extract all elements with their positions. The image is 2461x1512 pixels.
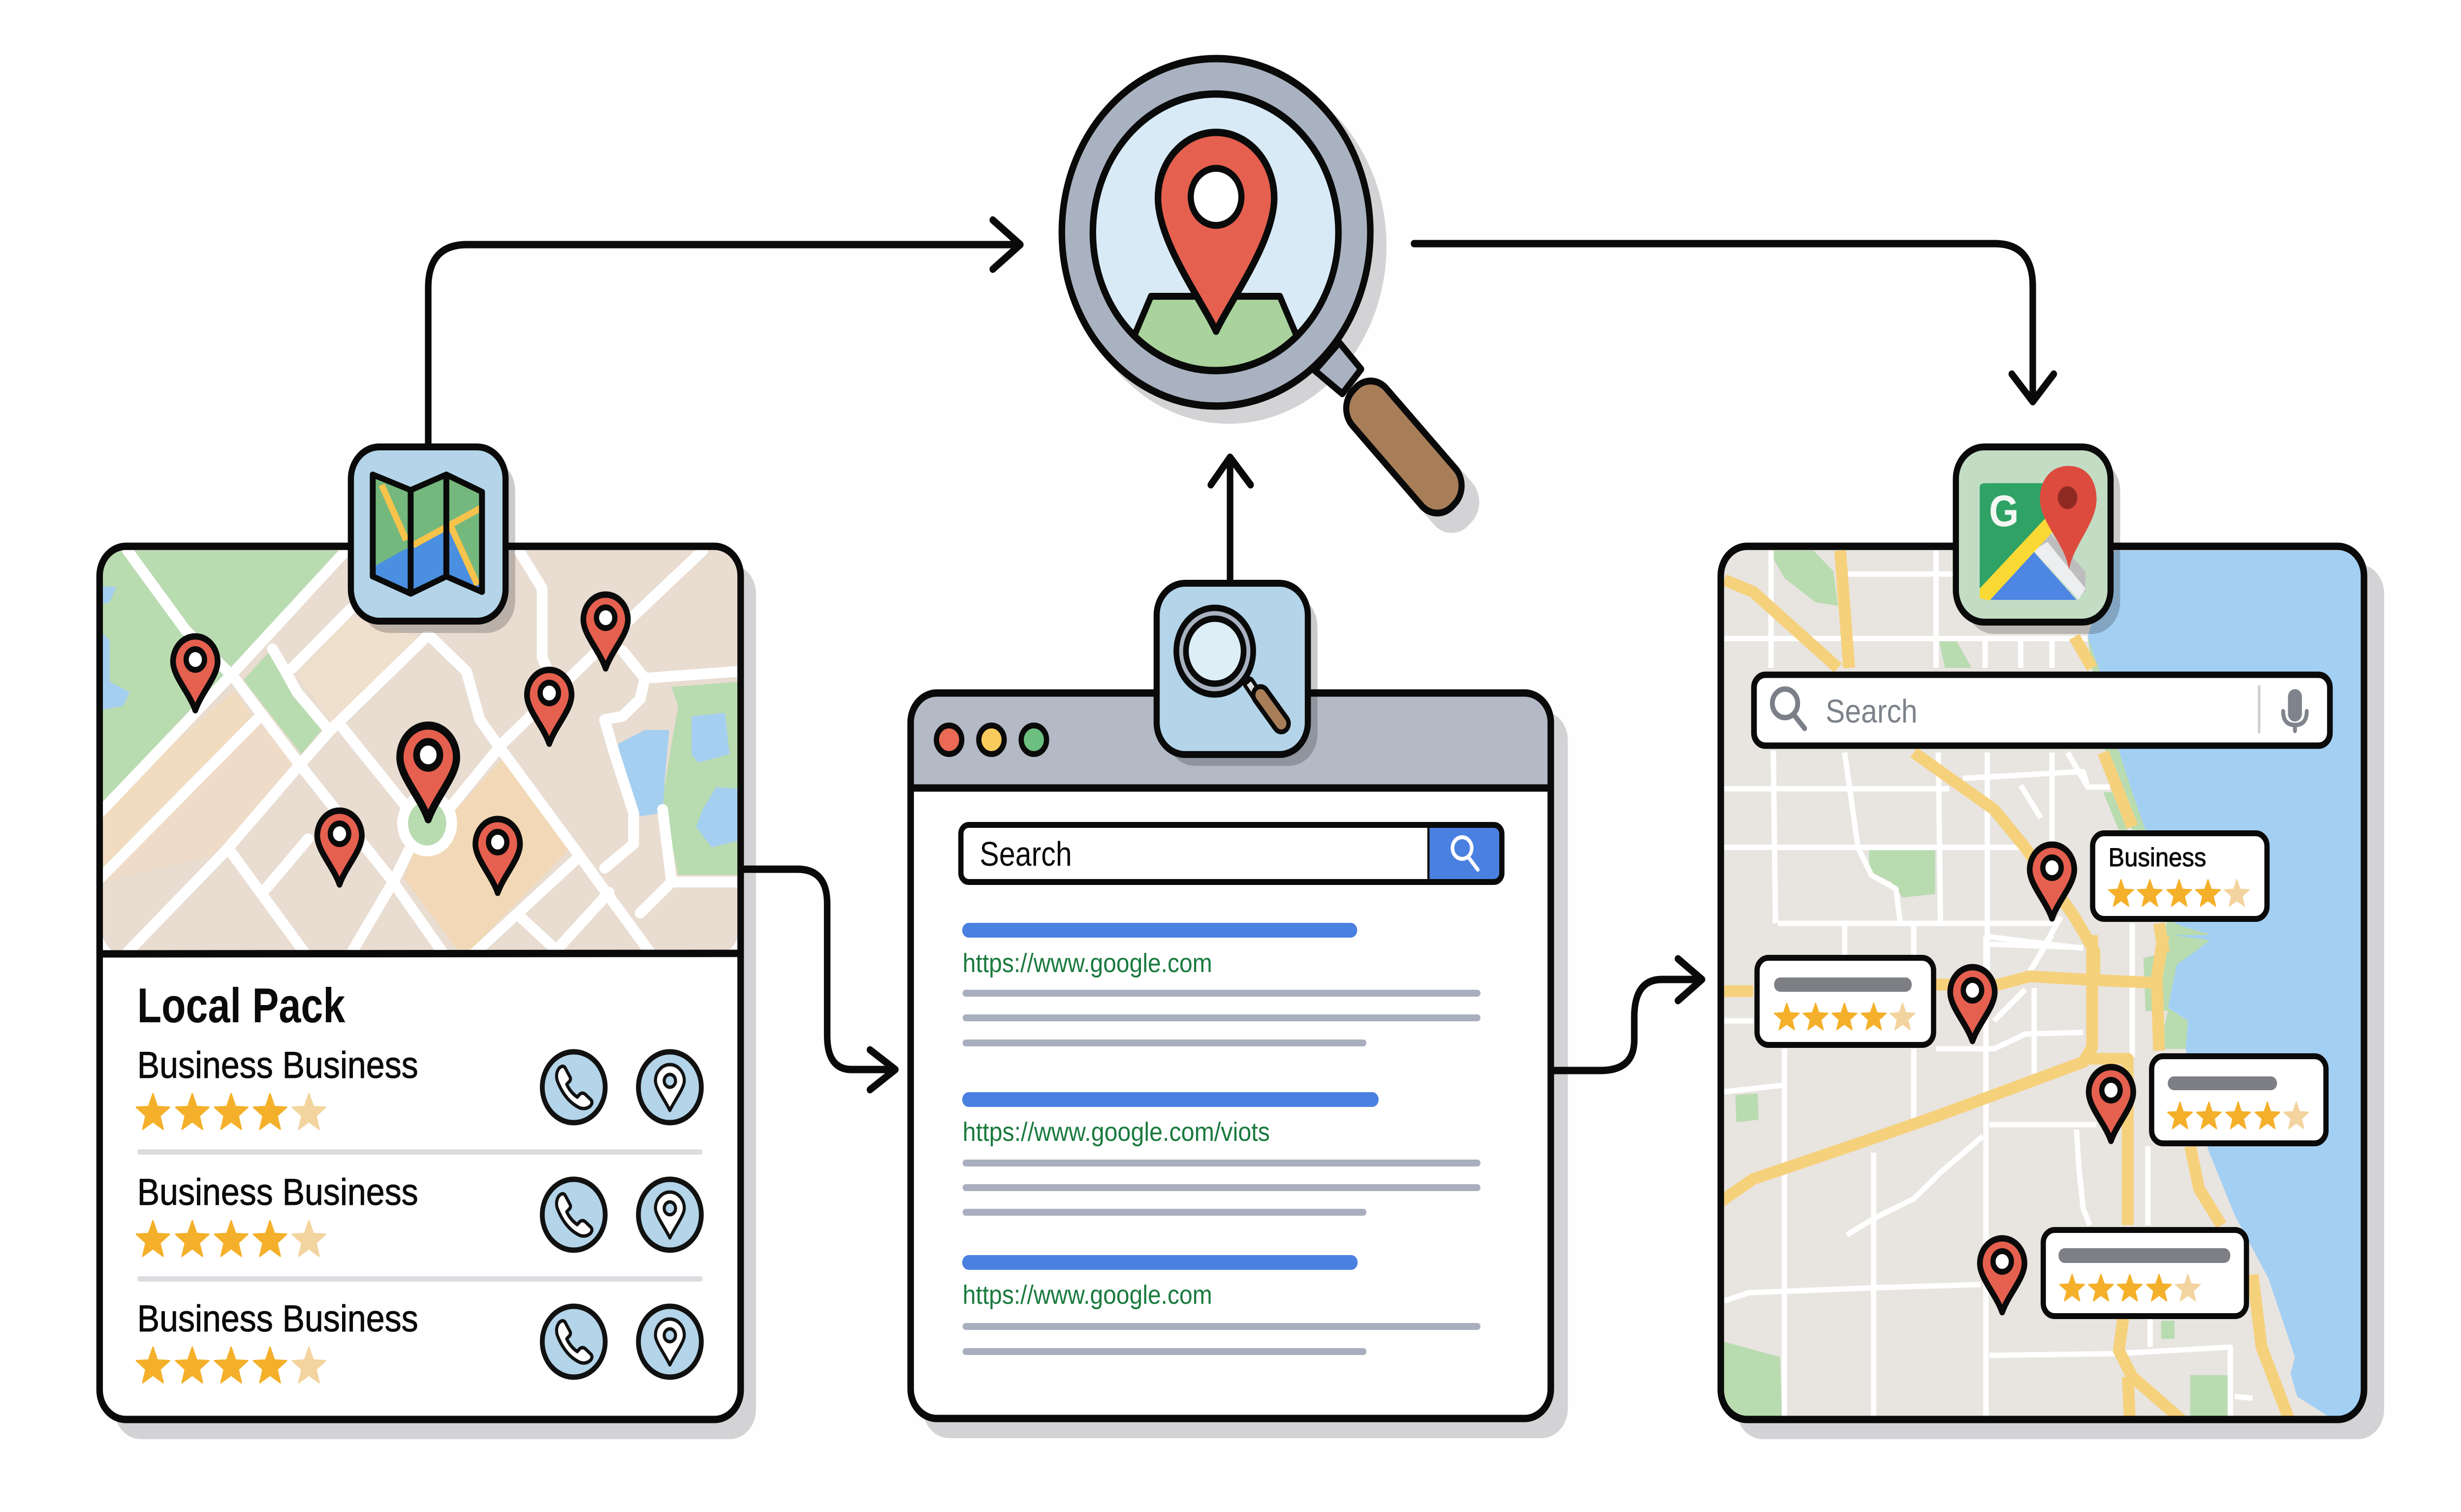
panel shadow	[115, 564, 756, 1439]
map pin	[583, 595, 628, 668]
callout: business	[2093, 833, 2267, 919]
icon tile: google maps	[1956, 447, 2120, 634]
magnifier lens	[1093, 94, 1338, 371]
icon tile: magnifier	[1157, 583, 1318, 766]
icon: microphone	[2283, 689, 2307, 731]
star rating	[136, 1347, 325, 1383]
window control: red	[937, 725, 962, 754]
icon tile: folded map	[351, 447, 515, 633]
panel: local pack	[96, 546, 756, 1439]
map	[1720, 546, 2368, 1423]
icon: google maps logo	[1980, 466, 2097, 600]
browser window	[911, 693, 1551, 1418]
map pin	[475, 819, 520, 893]
icon: location	[638, 1179, 701, 1250]
panel: search results browser	[911, 693, 1568, 1438]
result url: https://www.google.com	[963, 1280, 1212, 1310]
result url: https://www.google.com	[963, 948, 1212, 978]
icon: phone	[542, 1306, 605, 1377]
result title bar	[962, 923, 1357, 938]
arrow: local pack to search results	[743, 869, 895, 1090]
map pin: business	[2030, 845, 2074, 918]
star rating	[136, 1094, 325, 1129]
listing 3	[136, 1298, 701, 1383]
listing 2	[136, 1171, 701, 1256]
star rating	[2060, 1274, 2200, 1301]
map pin	[173, 636, 218, 710]
map pin: listing 3	[2089, 1067, 2133, 1141]
map search bar	[1754, 675, 2330, 746]
result title bar	[962, 1255, 1357, 1270]
panel shadow	[1736, 564, 2384, 1439]
title bar	[911, 693, 1551, 788]
location pin	[1158, 132, 1274, 331]
arrow: search tile to magnifier	[1211, 457, 1251, 581]
icon: phone	[542, 1052, 605, 1123]
listing 1	[136, 1044, 701, 1129]
result 3	[962, 1255, 1481, 1355]
map pin: listing 2	[1950, 967, 1995, 1041]
result snippet	[963, 1323, 1481, 1355]
callout: listing 4	[2043, 1230, 2246, 1316]
arrow: magnifier to google maps	[1414, 244, 2054, 402]
arrow: map tile to magnifier	[428, 220, 1020, 450]
magnifier with pin	[1062, 59, 1489, 544]
letter G: G	[1989, 487, 2019, 536]
search placeholder: Search	[1826, 693, 1918, 730]
map pin: large	[400, 725, 457, 819]
business name: Business Business	[137, 1298, 418, 1340]
arrow: results to google maps	[1552, 959, 1702, 1071]
window control: green	[1021, 725, 1046, 754]
business label: Business	[2109, 843, 2206, 872]
window control: yellow	[979, 725, 1004, 754]
callout: listing 3	[2151, 1056, 2326, 1143]
result title bar	[962, 1092, 1379, 1107]
panel border	[1721, 546, 2364, 1419]
search text: Search	[979, 835, 1072, 874]
magnifier shadow	[1071, 68, 1489, 544]
callout: listing 2	[1757, 958, 1933, 1045]
star rating	[2109, 880, 2249, 906]
business name: Business Business	[137, 1044, 418, 1086]
result 2	[962, 1092, 1481, 1216]
panel body	[99, 546, 741, 1419]
magnifier ring	[1062, 59, 1370, 406]
divider	[99, 953, 741, 954]
business name: Business Business	[137, 1171, 418, 1213]
search bar	[961, 825, 1502, 882]
green land	[1119, 296, 1311, 394]
icon: search	[1452, 837, 1478, 870]
result snippet	[963, 1160, 1481, 1216]
magnifier handle	[1337, 371, 1471, 523]
result url: https://www.google.com/viots	[963, 1117, 1270, 1147]
panel shadow	[923, 711, 1568, 1438]
star rating	[136, 1221, 325, 1256]
map pin	[317, 811, 362, 884]
map pin: listing 4	[1980, 1238, 2024, 1312]
icon: search	[1772, 689, 1805, 728]
panel border	[99, 546, 741, 1419]
magnifier neck	[1315, 343, 1361, 394]
result snippet	[963, 990, 1481, 1046]
heading: local pack: Local Pack	[137, 978, 346, 1033]
icon: location	[638, 1052, 701, 1123]
map pin	[527, 670, 571, 744]
icon: folded map	[373, 474, 482, 594]
star rating	[2168, 1102, 2309, 1129]
icon: phone	[542, 1179, 605, 1250]
icon: location	[638, 1306, 701, 1377]
result 1	[962, 923, 1481, 1046]
panel: google maps	[1720, 546, 2384, 1439]
icon: small magnifier	[1176, 608, 1281, 724]
star rating	[1774, 1003, 1915, 1030]
local map	[96, 546, 742, 955]
